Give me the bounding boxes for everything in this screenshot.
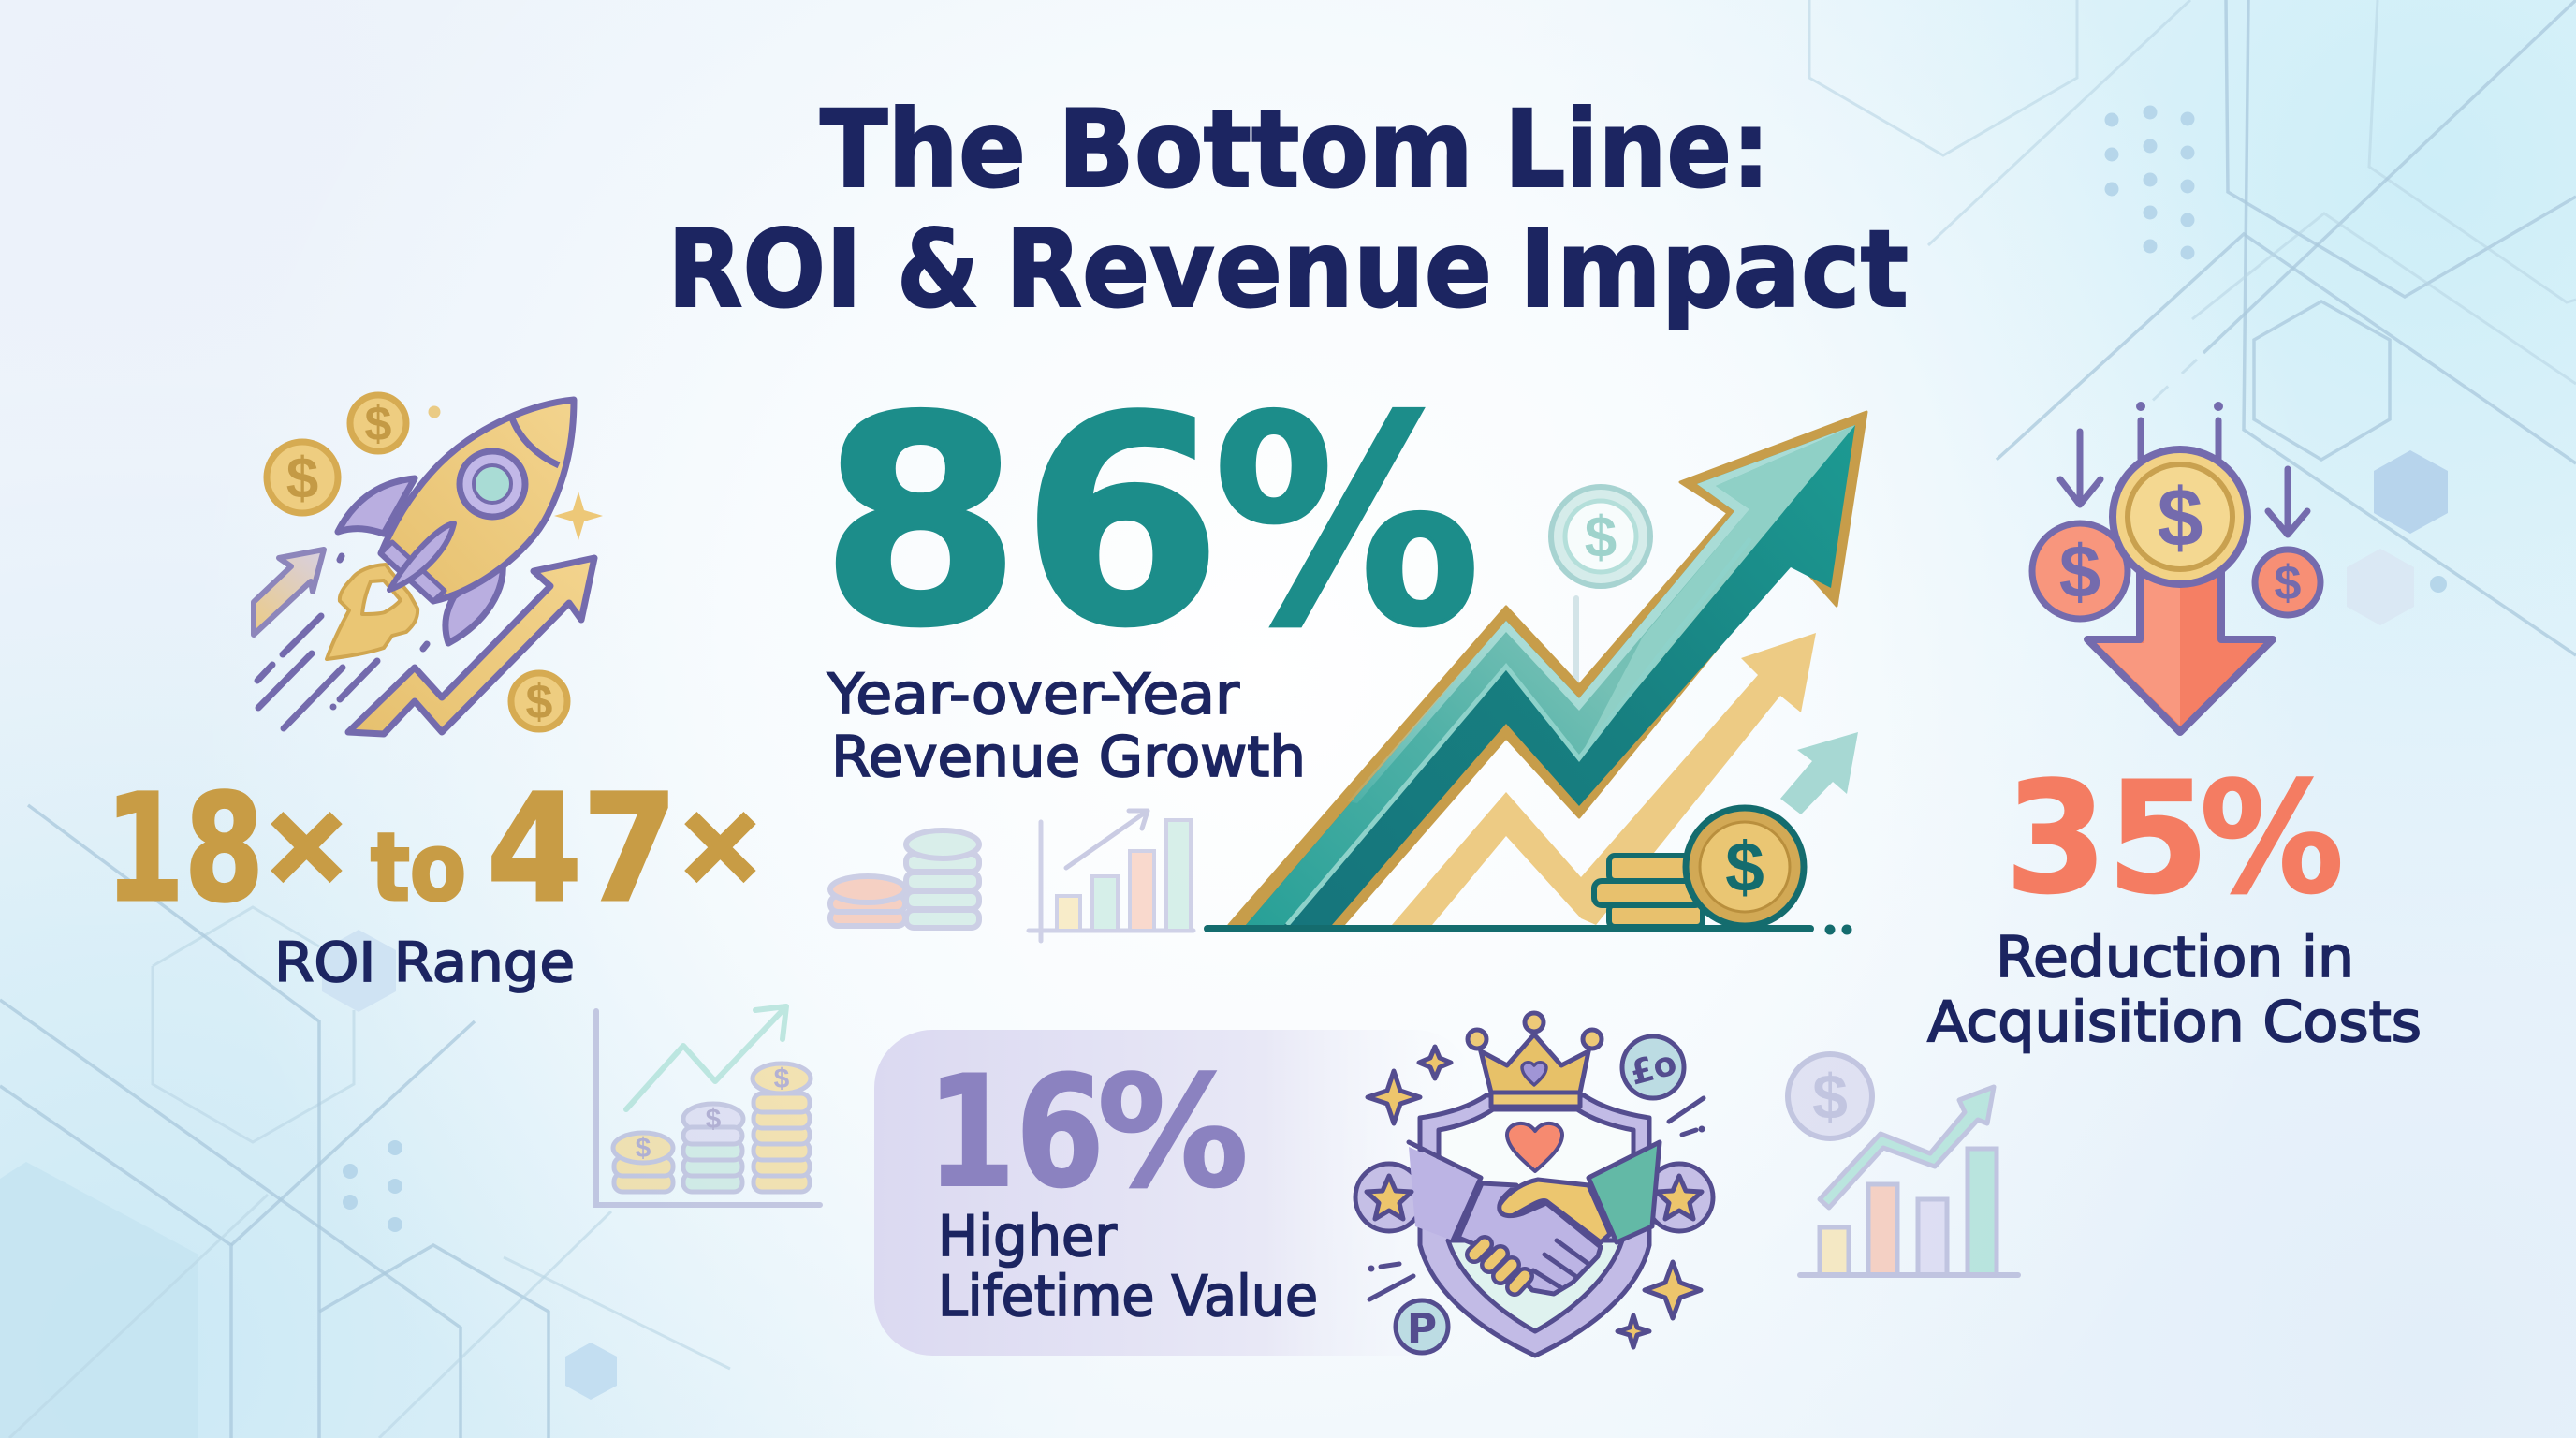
label: ROI Range: ROI Range bbox=[274, 931, 575, 994]
label: Reduction in Acquisition Costs: Reduction in bbox=[1996, 925, 2354, 990]
arrow: main growth arrow bbox=[1229, 412, 1866, 925]
title: Line: bbox=[1504, 87, 1770, 212]
panel: ROI range bbox=[105, 395, 767, 994]
icon: shield handshake with crown: P bbox=[1407, 1305, 1437, 1353]
arrow: small teal arrow bbox=[1780, 732, 1858, 814]
icon: coin stacks chart: $ bbox=[774, 1064, 790, 1094]
icon: rocket with coins: $ bbox=[286, 447, 318, 511]
icon: shield handshake with crown: £o bbox=[1626, 1044, 1681, 1093]
arrow: gold back arrow bbox=[1392, 633, 1816, 925]
icon: rocket with coins: $ bbox=[526, 675, 553, 729]
label: Reduction in Acquisition Costs: Acquisition Costs bbox=[1927, 990, 2422, 1055]
icon: shield handshake with crown bbox=[1355, 1013, 1713, 1356]
icon: pale coin stacks bbox=[830, 830, 979, 928]
icon: coin stacks chart: $ bbox=[706, 1104, 722, 1135]
stat: 86% bbox=[820, 357, 1481, 690]
icon: gold coins with base line: $ bbox=[1725, 828, 1764, 906]
icon: pale coin with stem bbox=[1551, 487, 1650, 685]
stat: 18x to 47x bbox=[105, 763, 767, 935]
stat: 35% bbox=[2005, 749, 2344, 928]
label: Reduction in Acquisition Costs bbox=[1927, 925, 2422, 1055]
icon: rocket with coins bbox=[254, 395, 603, 734]
panel: lifetime value bbox=[874, 1013, 1713, 1356]
label: Year-over-Year Revenue Growth bbox=[827, 662, 1306, 790]
title: ROI bbox=[667, 207, 862, 331]
panel: acquisition cost reduction bbox=[1927, 402, 2422, 1055]
icon: coins and down arrow: $ bbox=[2275, 556, 2302, 610]
stat: 18x to 47x: 18 bbox=[105, 763, 264, 935]
title: & bbox=[897, 207, 979, 331]
title: Revenue bbox=[1005, 207, 1492, 331]
icon: coins and down arrow: $ bbox=[2158, 471, 2203, 564]
title bbox=[667, 87, 1909, 331]
title: Bottom bbox=[1058, 87, 1473, 212]
panel: revenue growth bbox=[820, 357, 1866, 941]
icon: coins and down arrow bbox=[2032, 402, 2320, 732]
stat: 18x to 47x: × bbox=[674, 779, 767, 908]
icon: rocket with coins: $ bbox=[365, 397, 392, 451]
stat: 16%: 16 bbox=[927, 1043, 1105, 1222]
title: Impact bbox=[1519, 207, 1909, 331]
label: Higher Lifetime Value: Lifetime Value bbox=[938, 1264, 1318, 1329]
label: Higher Lifetime Value bbox=[938, 1204, 1318, 1329]
stat: 35%: % bbox=[2200, 749, 2344, 928]
icon: coin stacks chart bbox=[596, 1006, 820, 1205]
icon: pale coin with stem: $ bbox=[1585, 506, 1617, 570]
icon: pale bar chart with coin bbox=[1788, 1054, 2018, 1275]
stat: 18x to 47x: to bbox=[371, 813, 466, 922]
stat: 86%: % bbox=[1213, 357, 1481, 690]
title: The bbox=[820, 87, 1026, 212]
label: Year-over-Year Revenue Growth: Revenue Growth bbox=[831, 725, 1306, 790]
icon: coins and down arrow: $ bbox=[2059, 530, 2100, 613]
stat: 18x to 47x: 47 bbox=[487, 763, 678, 935]
icon: pale bar chart with coin: $ bbox=[1812, 1062, 1848, 1133]
label: Year-over-Year Revenue Growth: Year-over-Year bbox=[827, 662, 1239, 727]
icon: pale bar chart bbox=[1029, 811, 1193, 941]
label: Higher Lifetime Value: Higher bbox=[938, 1204, 1117, 1269]
stat: 16% bbox=[927, 1043, 1249, 1222]
stat: 16%: % bbox=[1097, 1043, 1249, 1222]
icon: gold coins with base line bbox=[1204, 808, 1852, 934]
stat: 18x to 47x: × bbox=[260, 779, 353, 908]
stat: 86%: 86 bbox=[820, 357, 1222, 690]
icon: coin stacks chart: $ bbox=[636, 1133, 651, 1164]
stat: 35%: 35 bbox=[2005, 749, 2209, 928]
